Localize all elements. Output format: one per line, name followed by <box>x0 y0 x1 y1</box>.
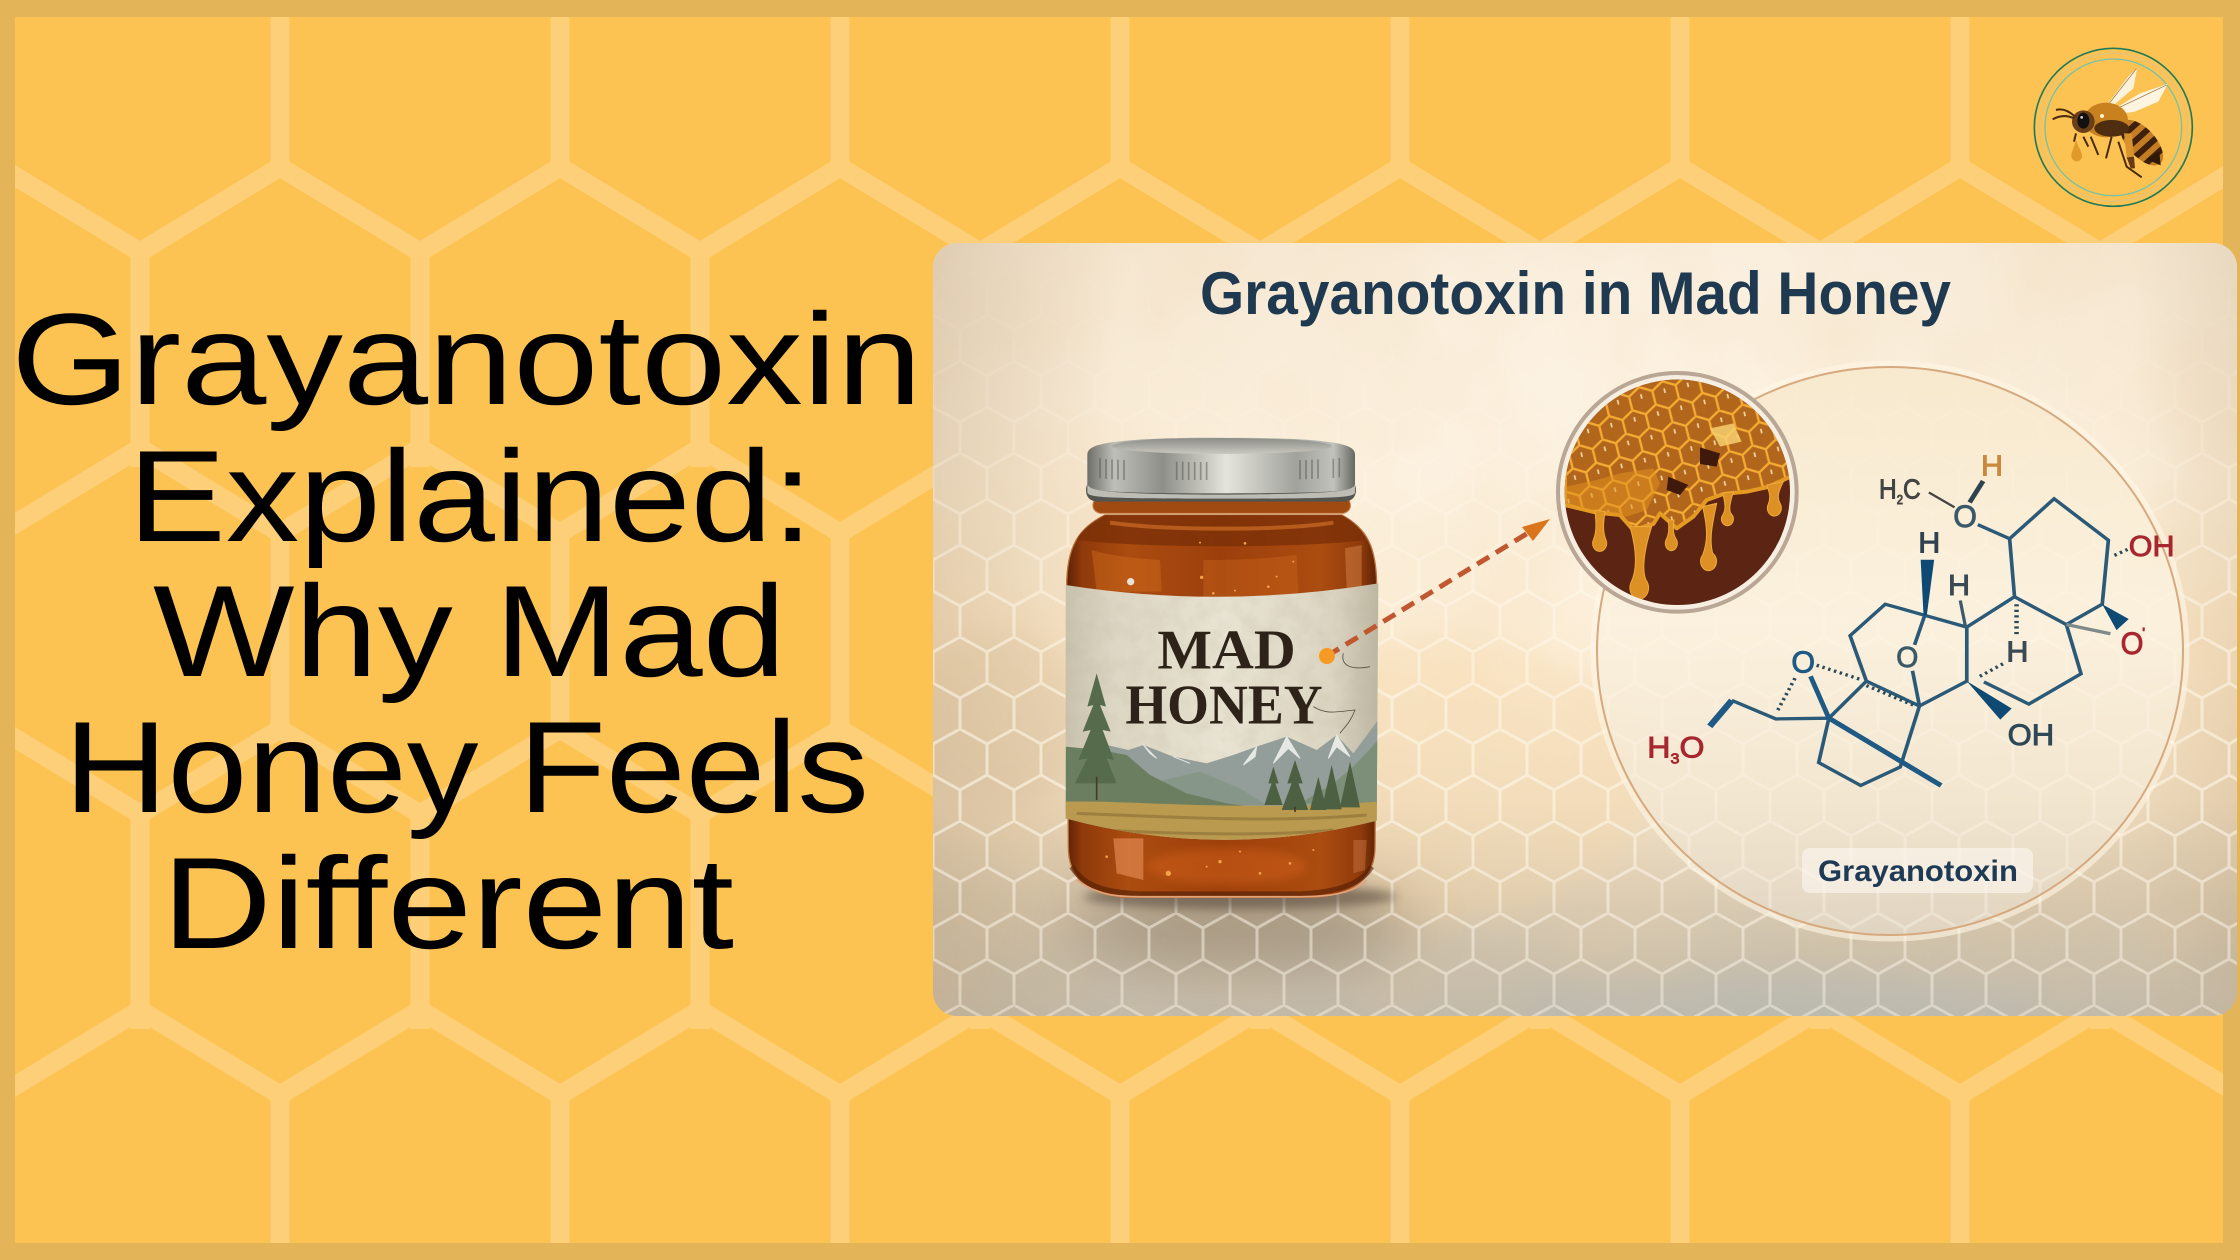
title: Grayanotoxin Explained <box>11 286 922 976</box>
jar label text <box>1125 619 1323 736</box>
molecule: grayanotoxin structural formula: H <box>1647 731 1671 764</box>
molecule: grayanotoxin structural formula: H <box>1918 528 1940 559</box>
jar shadow <box>1083 884 1397 909</box>
title: Grayanotoxin Explained: Why Mad <box>153 558 786 704</box>
title: Grayanotoxin Explained: Different <box>162 830 734 976</box>
jar: Mad Honey jar <box>1063 437 1397 909</box>
disc: molecule background circle <box>1594 364 2186 938</box>
inset: honeycomb with dripping honey <box>1558 373 1797 612</box>
molecule: grayanotoxin structural formula: OH <box>2129 531 2174 563</box>
molecule: grayanotoxin structural formula: C <box>1903 475 1921 505</box>
molecule: grayanotoxin structural formula: H <box>1981 451 2003 482</box>
panel background: painted honeycomb wash <box>910 243 2237 1035</box>
molecule: grayanotoxin structural formula: O <box>1791 645 1815 679</box>
molecule: grayanotoxin structural formula: ' <box>2142 624 2145 640</box>
arrow: dashed pointer from jar to honeycomb <box>1319 519 1550 664</box>
title: Grayanotoxin Explained: Explained: <box>128 423 813 569</box>
molecule: grayanotoxin structural formula: H <box>2006 637 2028 668</box>
molecule: grayanotoxin structural formula: OH <box>2008 718 2054 751</box>
heading: panel title: Grayanotoxin in Mad Honey <box>1200 260 1952 327</box>
molecule: grayanotoxin structural formula: H <box>1879 475 1901 505</box>
molecule: grayanotoxin structural formula: O <box>1953 499 1977 534</box>
jar lid <box>1086 437 1356 502</box>
molecule: grayanotoxin structural formula: O <box>1679 731 1704 764</box>
molecule: grayanotoxin structural formula: 3 <box>1671 751 1679 767</box>
label: Grayanotoxin pill <box>1802 848 2033 893</box>
label: Grayanotoxin pill: Grayanotoxin <box>1818 855 2018 888</box>
title: Grayanotoxin Explained: Honey Feels <box>64 694 869 840</box>
jar label text: MAD <box>1157 619 1296 681</box>
molecule: grayanotoxin structural formula: O <box>2121 626 2143 661</box>
title: Grayanotoxin Explained: Grayanotoxin <box>11 286 922 432</box>
jar body <box>1067 501 1377 897</box>
jar label text: HONEY <box>1125 674 1323 736</box>
molecule: grayanotoxin structural formula: H <box>1948 570 1970 602</box>
jar label <box>1066 584 1378 840</box>
icon: bee logo badge <box>2034 48 2192 206</box>
molecule: grayanotoxin structural formula: O <box>1896 642 1918 674</box>
panel: Grayanotoxin in Mad Honey illustration <box>910 243 2237 1035</box>
molecule: grayanotoxin structural formula <box>1647 451 2174 786</box>
molecule: grayanotoxin structural formula: 2 <box>1897 493 1903 507</box>
